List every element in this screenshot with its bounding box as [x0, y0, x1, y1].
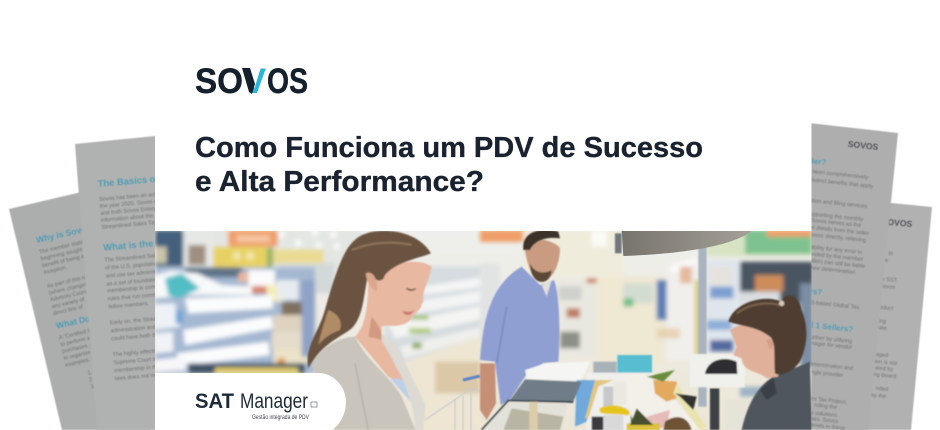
second right sheet text: ulation and filing services — [805, 197, 868, 210]
second right sheet text: manager for vendor — [803, 340, 853, 351]
title — [195, 132, 703, 198]
far left sheet text: What Do — [55, 313, 91, 331]
far left sheet text: to perform a — [60, 335, 92, 348]
second right sheet text: Model 1 Sellers? — [790, 318, 854, 334]
photo: cashier — [728, 295, 812, 430]
second left sheet text: and both Sovos Enterprise — [100, 205, 166, 217]
second left sheet text: Sovos has been an active — [99, 191, 163, 203]
second left sheet text: the year 2020. Sovos is — [99, 199, 158, 210]
second right sheet text — [790, 139, 879, 430]
second left sheet text: fellow members. — [108, 301, 150, 311]
photo: man in blue shirt — [480, 230, 560, 420]
far left sheet text: A "Certified S — [58, 328, 92, 341]
second right sheet text: Sales Tax Project, — [802, 395, 848, 406]
far left sheet text: Advisory Council — [50, 288, 92, 303]
far left sheet text: 3. — [90, 384, 97, 391]
far right sheet text: tion is not — [873, 359, 898, 367]
far left sheet text: 1. — [87, 370, 93, 377]
second left sheet text: What is the — [103, 237, 154, 253]
badge: SAT Manager — [155, 373, 346, 430]
far right sheet text: Sovos — [879, 284, 896, 291]
second left sheet text: laws does not requ — [115, 372, 162, 382]
second left sheet text: Supreme Court in — [113, 357, 157, 366]
photo: woman customer — [308, 231, 432, 430]
second right sheet text: determination and — [808, 361, 853, 372]
second right sheet text: SOVOS — [847, 139, 879, 152]
far left sheet text: As part of this re — [46, 275, 87, 290]
logo: Sovos — [195, 62, 308, 101]
back sheet: far left — [9, 190, 150, 430]
far right sheet text: rate. — [877, 325, 889, 332]
SAT Manager logotype: Gestão integrada de PDV — [252, 415, 309, 421]
second left sheet text — [97, 172, 181, 382]
far right sheet text: e — [885, 258, 888, 264]
far left sheet text: to organize — [63, 350, 91, 362]
second right sheet text: Sellers can still be liable — [805, 258, 865, 270]
white cover card — [155, 20, 812, 232]
back sheet: far right — [840, 200, 932, 430]
second right sheet text: ases. Sovos — [807, 416, 839, 425]
far right sheet text: ing — [878, 318, 886, 325]
back sheet: second right — [790, 122, 898, 430]
far left sheet text: direct line of — [53, 304, 84, 317]
far right sheet text: by the — [871, 393, 886, 400]
second right sheet text: their determination — [809, 265, 855, 276]
far right sheet text: aged — [875, 352, 888, 359]
second left sheet text: administration and — [110, 324, 156, 334]
second left sheet text: and use tax administr — [106, 269, 159, 280]
photo background: right of woman — [384, 266, 484, 397]
second right sheet text: Sovos directly, relieving — [808, 232, 866, 244]
second left sheet text: Early on, the Stream — [110, 316, 161, 326]
second right sheet text: r, Sovos serves as the — [806, 217, 861, 229]
second left sheet text: of the U.S. population — [105, 261, 159, 272]
second right sheet text: single provider — [807, 369, 844, 379]
second left sheet text: rules that run comm — [108, 292, 158, 303]
photo background: left aisle — [155, 229, 362, 373]
far right sheet text: product — [874, 304, 894, 312]
logo: Sovos: OS — [267, 62, 308, 101]
far right sheet text: to — [888, 251, 893, 257]
second right sheet text: provided by the member — [803, 251, 864, 263]
far left sheet text: Why is Sovos a — [35, 221, 99, 245]
far right sheet text — [871, 216, 913, 400]
second left sheet text: membership is compr — [107, 284, 161, 295]
photo: checkout hood and post — [615, 230, 753, 407]
far right sheet text: the SST — [877, 276, 898, 284]
far left sheet text: purchases. A — [62, 342, 95, 355]
second right sheet text: supporting the monthly — [807, 211, 864, 223]
second left sheet text: as a set of foundation — [106, 277, 160, 288]
second left sheet text: could have both the — [111, 332, 160, 342]
second right sheet text: nal details from the seller — [807, 225, 870, 237]
photo: supermarket checkout — [155, 229, 813, 430]
far right sheet text: SOVOS — [881, 216, 913, 229]
far left sheet text: examples, C — [65, 356, 96, 369]
far right sheet text: nded — [875, 386, 888, 393]
second right sheet text: distinct benefits that apply — [809, 177, 874, 190]
SAT Manager logotype: Manager — [240, 390, 308, 413]
logo: Sovos: SO — [195, 62, 243, 101]
photo background: center and right aisle — [480, 230, 813, 397]
back sheet: second left — [75, 135, 181, 430]
second right sheet text: Seller? — [799, 155, 827, 167]
far left sheet text — [35, 221, 134, 395]
second right sheet text: has been comprehensively — [802, 168, 869, 181]
far right sheet text: ated by — [875, 365, 894, 373]
second left sheet text: Streamlined Sales Tax — [101, 220, 157, 231]
second left sheet text: The Basics of — [97, 173, 160, 189]
far left sheet text: benefit of being a — [42, 254, 86, 269]
second left sheet text: The highly effective — [112, 348, 161, 358]
title: e Alta Performance? — [195, 166, 484, 198]
far left sheet text: inception. — [43, 265, 68, 276]
photo: checkout counter and groceries — [482, 354, 753, 430]
second right sheet text: nding the — [814, 403, 837, 411]
far left sheet text: (where changes — [48, 282, 88, 297]
second left sheet text: The Streamlined Sales — [104, 253, 161, 264]
second right sheet text: s solutions — [810, 410, 838, 419]
SAT Manager logotype — [195, 389, 317, 421]
far left sheet text: 2. — [89, 377, 95, 384]
second right sheet text: liability for any error in — [807, 244, 862, 256]
far left sheet text: The member states — [39, 239, 87, 256]
far left sheet text: any variety of — [51, 297, 85, 310]
second right sheet text: SaaS-based Global Tax — [800, 299, 860, 311]
far left sheet text: beginning sought the — [40, 245, 92, 262]
cart in background — [425, 376, 480, 430]
SAT Manager logotype: SAT — [195, 389, 234, 413]
second left sheet text: membership in the — [114, 364, 160, 374]
second right sheet text: Sellers? — [791, 285, 823, 297]
second left sheet text: information about the — [101, 213, 154, 224]
logo: Sovos: V — [243, 62, 267, 101]
title: Como Funciona um PDV de Sucesso — [195, 132, 703, 164]
far right sheet text: ing Board — [872, 372, 896, 380]
second right sheet text: further by utilizing — [808, 334, 852, 345]
